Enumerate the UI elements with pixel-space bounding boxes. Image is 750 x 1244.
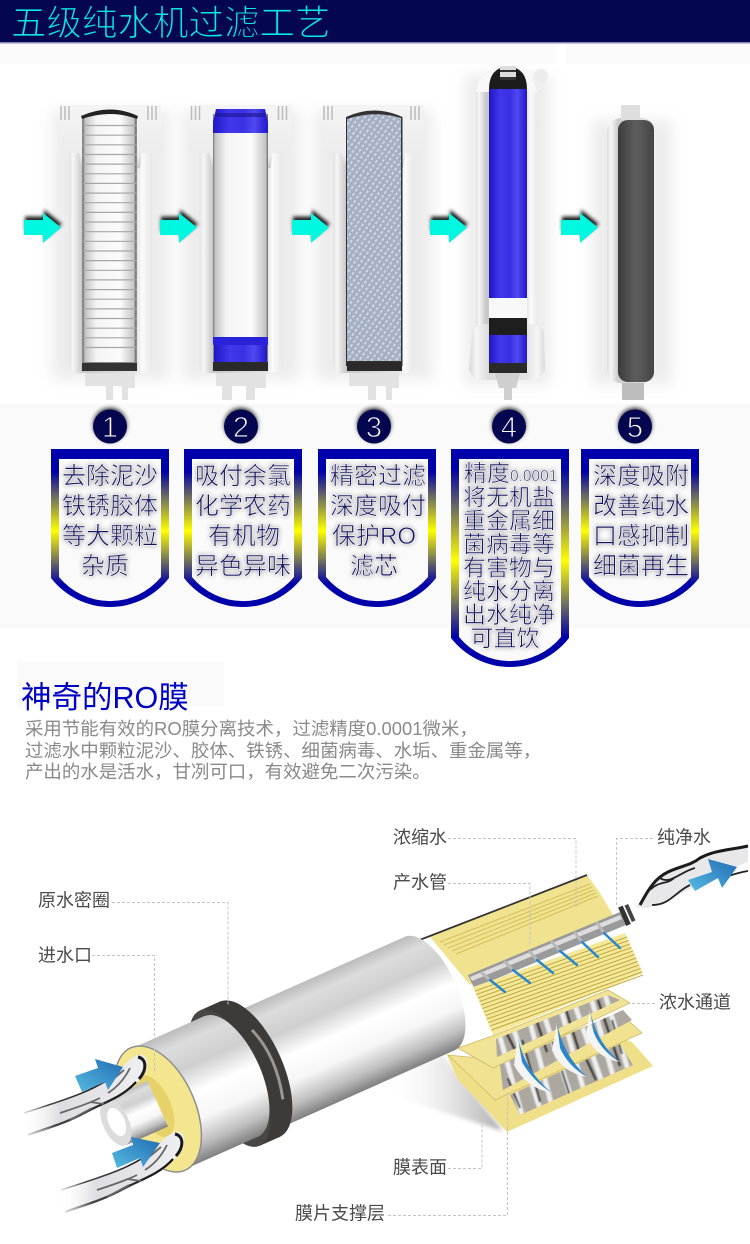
heading backdrop — [17, 661, 224, 707]
step number 5: 5 — [627, 412, 643, 444]
step number 3 — [357, 408, 391, 444]
text: filter 5 description: 深度吸附 — [593, 463, 689, 490]
text: filter 2 description: 吸付余氯 — [195, 463, 291, 490]
text: filter 2 description: 化学农药 — [195, 493, 291, 520]
text: filter 3 description: 滤芯 — [350, 553, 398, 580]
leader line: seal ring — [112, 902, 228, 1005]
description paragraph: 过滤水中颗粒泥沙、胶体、铁锈、细菌病毒、水垢、重金属等， — [25, 740, 541, 761]
label: membrane surface: 膜表面 — [393, 1158, 447, 1178]
leader line: concentrate — [448, 838, 576, 907]
description paragraph: 产出的水是活水，甘冽可口，有效避免二次污染。 — [25, 761, 431, 782]
inlet blue arrow top — [75, 1059, 123, 1092]
label: concentrate channel: 浓水通道 — [659, 992, 731, 1012]
filter 2: activated carbon cartridge — [182, 105, 300, 400]
text: filter 4 description: 菌病毒等 — [463, 531, 555, 557]
product water pipe — [468, 904, 635, 988]
flow arrow 1 — [24, 210, 62, 243]
bottom membrane layer — [447, 1030, 653, 1132]
shield panel 3 — [318, 449, 436, 607]
text: filter 1 description — [62, 463, 158, 580]
water channel texture — [496, 995, 633, 1115]
text: filter 4 description: 将无机盐 — [463, 484, 555, 510]
label: water inlet: 进水口 — [38, 946, 92, 966]
step number 2: 2 — [233, 412, 249, 444]
leader line: water inlet — [92, 956, 154, 1072]
flow arrow 2 — [160, 210, 198, 243]
inlet water stream bottom — [60, 1132, 184, 1213]
step number 5 — [618, 408, 652, 444]
front face — [79, 1033, 219, 1193]
shield panel 4 — [451, 449, 569, 667]
title bar — [0, 0, 750, 44]
label: membrane support layer: 膜片支撑层 — [295, 1204, 385, 1224]
step number 4 — [492, 408, 526, 444]
text: filter 4 description — [463, 460, 557, 651]
text: filter 4 description: 出水纯净 — [463, 602, 555, 628]
text: filter 5 description: 改善纯水 — [593, 493, 689, 520]
text: filter 3 description: 深度吸付 — [330, 493, 426, 520]
label: product tube: 产水管 — [393, 872, 447, 892]
front tube section — [131, 1004, 285, 1169]
label: concentrate: 浓缩水 — [393, 828, 447, 848]
text: filter 3 description: 精密过滤 — [330, 463, 426, 490]
step number 1: 1 — [102, 412, 118, 444]
inlet water stream top — [23, 1055, 147, 1136]
shield panel 5 — [581, 449, 699, 607]
text: filter 3 description: 保护RO — [332, 523, 416, 550]
big silver tube — [76, 911, 484, 1201]
leader line: concentrate channel — [625, 1002, 655, 1004]
text: filter 1 description: 铁锈胶体 — [62, 493, 158, 520]
description paragraph — [25, 718, 541, 782]
title: 五级纯水机过滤工艺 — [11, 3, 331, 43]
shield panel 1 — [51, 449, 169, 607]
middle membrane layer — [448, 1013, 642, 1100]
flow arrow 5 — [561, 210, 599, 243]
flow arrow 3 — [292, 210, 330, 243]
water flow streaks — [514, 1010, 620, 1093]
text: filter 4 description: 纯水分离 — [463, 578, 555, 604]
leader line: product tube — [448, 884, 530, 945]
text: filter 4 description: 有害物与 — [463, 554, 555, 580]
shield panel 2 — [184, 449, 302, 607]
filter 3: precision carbon cartridge — [315, 105, 433, 400]
description paragraph: 采用节能有效的RO膜分离技术，过滤精度0.0001微米， — [25, 718, 478, 739]
outlet water stream — [636, 845, 748, 908]
text: filter 5 description — [593, 463, 689, 580]
text: filter 4 description: 可直饮 — [470, 625, 540, 651]
step number 2 — [224, 408, 258, 444]
filter 5: post carbon cartridge — [592, 105, 672, 400]
section heading: 神奇的RO膜 — [21, 681, 189, 715]
outlet blue arrow — [688, 859, 737, 891]
upper membrane layer — [458, 990, 630, 1068]
step number 3: 3 — [366, 412, 382, 444]
step number 4: 4 — [501, 412, 517, 444]
text: filter 1 description: 杂质 — [81, 553, 129, 580]
text: filter 4 description: 重金属细 — [463, 508, 555, 534]
label: seal ring: 原水密圈 — [38, 890, 110, 910]
filter 1: PP cotton cartridge — [52, 105, 170, 400]
text: filter 1 description: 等大颗粒 — [62, 523, 158, 550]
leader line: membrane support — [388, 1090, 508, 1216]
label: pure water: 纯净水 — [657, 828, 711, 848]
front membrane sheet — [473, 933, 643, 1035]
flow arrow 4 — [430, 210, 468, 243]
leader line: pure water — [616, 838, 653, 905]
text: filter 2 description — [195, 463, 291, 580]
seal ring — [172, 988, 310, 1158]
text: filter 3 description — [330, 463, 426, 580]
text: filter 4 description: 精度0.0001 — [464, 460, 557, 486]
back membrane sheet — [417, 875, 613, 985]
text: filter 1 description: 去除泥沙 — [62, 463, 158, 490]
RO membrane diagram — [23, 845, 748, 1213]
text: filter 2 description: 异色异味 — [195, 553, 291, 580]
inlet blue arrow bottom — [112, 1137, 160, 1168]
text: filter 2 description: 有机物 — [208, 523, 280, 550]
text: filter 5 description: 细菌再生 — [593, 553, 689, 580]
step number 1 — [93, 408, 127, 444]
filter 4: RO membrane cartridge — [465, 66, 550, 400]
text: filter 5 description: 口感抑制 — [593, 523, 689, 550]
shadow under membrane — [385, 1055, 503, 1131]
leader line: membrane surface — [448, 1110, 482, 1168]
pipe drip streaks — [482, 923, 620, 992]
